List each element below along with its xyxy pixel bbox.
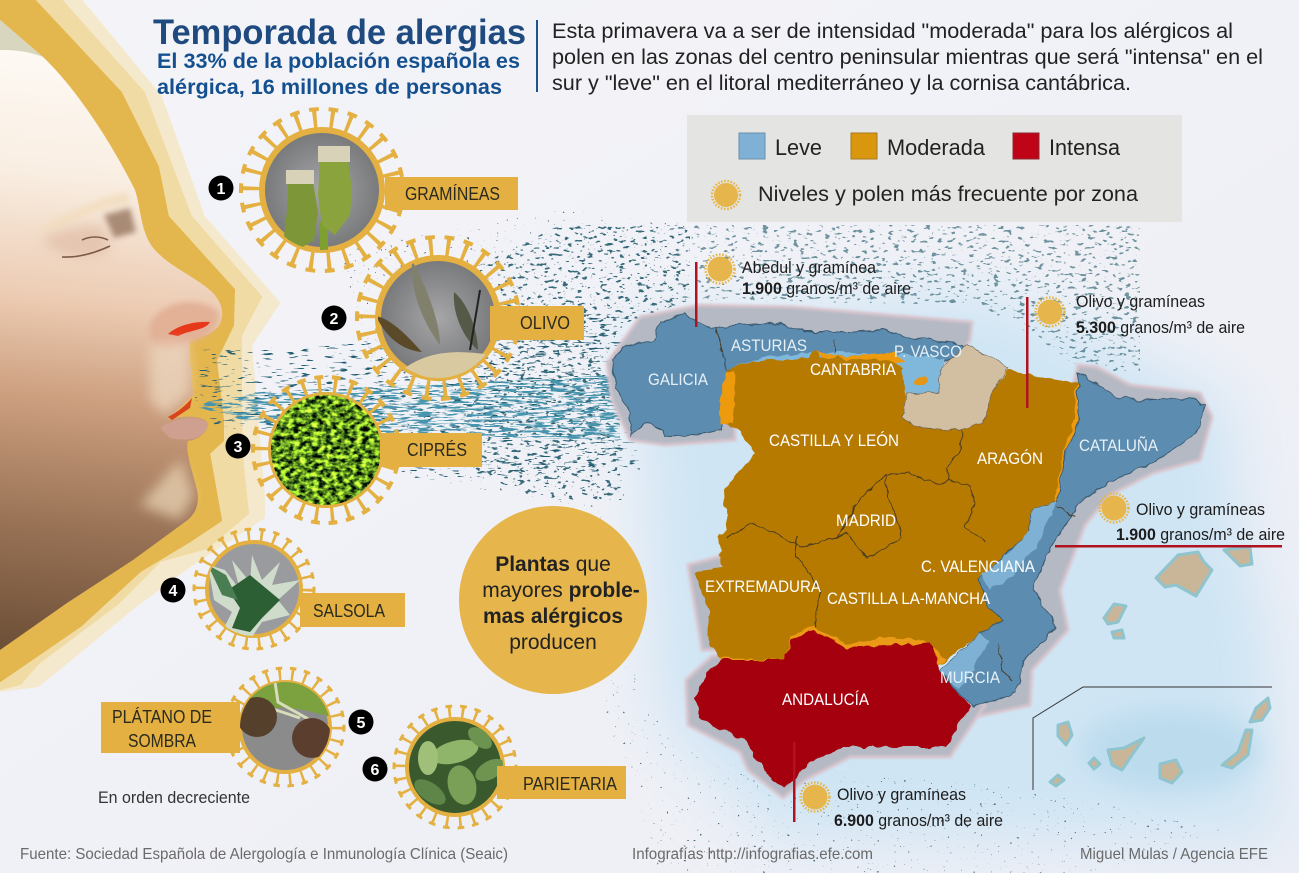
region labels: MURCIA <box>940 668 1001 687</box>
callout: Mediterranean pollen level: 1.900 granos/m³ de aire <box>1116 525 1285 544</box>
callout circle: plants causing the most problems <box>459 506 647 694</box>
intro paragraph: Esta primavera va a ser de intensidad "moderada" para los alérgicos al <box>552 20 1233 43</box>
bright orange band north of Andalucía <box>720 626 945 668</box>
plant 2: olivo <box>322 237 584 399</box>
callout circle: plants causing the most problems: mas alérgicos <box>483 605 623 628</box>
land regions with rough coastline <box>612 313 1205 788</box>
subtitle: El 33% de la población española es <box>157 50 520 73</box>
callout: north-east pollen level: 5.300 granos/m³ de aire <box>1076 318 1245 337</box>
coastal halo <box>607 305 1212 798</box>
gold halo around the profile <box>0 0 278 690</box>
plant 3: ciprés <box>226 377 482 523</box>
title block <box>153 13 526 99</box>
legend: Intensa <box>1049 135 1121 160</box>
region: Galicia <box>612 313 729 437</box>
region labels: GALICIA <box>648 370 709 389</box>
region labels: ARAGÓN <box>977 449 1043 468</box>
legend <box>687 115 1182 222</box>
plant 1: gramíneas: GRAMÍNEAS <box>405 184 500 204</box>
region labels: C. VALENCIANA <box>921 557 1036 576</box>
Balearic islands <box>1104 547 1252 638</box>
plant 5: plátano de sombra: PLÁTANO DE <box>112 707 212 727</box>
region labels: MADRID <box>836 511 896 530</box>
region: moderate central block <box>694 350 1080 667</box>
region labels: CANTABRIA <box>810 360 897 379</box>
callout: north-west pollen level: 1.900 granos/m³ de aire <box>742 279 911 298</box>
plant 6: parietaria: PARIETARIA <box>523 774 617 794</box>
region labels <box>648 336 1159 709</box>
callout: south pollen level <box>793 742 1003 830</box>
callout: south pollen level: 6.900 granos/m³ de aire <box>834 811 1003 830</box>
callout: Mediterranean pollen level <box>1055 494 1285 548</box>
plant 5: plátano de sombra: SOMBRA <box>128 731 196 751</box>
plant 1: gramíneas <box>208 109 518 271</box>
plant 6: parietaria <box>362 706 626 828</box>
legend: Leve <box>775 135 822 160</box>
region labels: CASTILLA LA-MANCHA <box>827 589 991 608</box>
intro paragraph: polen en las zonas del centro peninsular mientras que será "intensa" en el <box>552 46 1263 69</box>
plant 5: plátano de sombra: 5 <box>357 715 366 732</box>
light blue coastal gap <box>727 352 945 393</box>
sea glow around the peninsula <box>620 290 1280 840</box>
callout: north-east pollen level <box>1026 292 1245 408</box>
intro paragraph <box>552 20 1263 95</box>
callout: Mediterranean pollen level: Olivo y gramíneas <box>1136 500 1265 519</box>
region labels: EXTREMADURA <box>705 577 822 596</box>
callout: north-west pollen level <box>695 254 911 327</box>
plant 5: plátano de sombra <box>101 668 374 786</box>
subtitle <box>157 50 520 99</box>
region labels: ANDALUCÍA <box>782 690 870 709</box>
region: Navarra, La Rioja and Euskadi <box>902 345 1008 430</box>
callout: north-east pollen level: Olivo y gramíneas <box>1076 292 1205 311</box>
plant 6: parietaria: 6 <box>371 762 380 779</box>
callout circle: plants causing the most problems: producen <box>509 631 597 654</box>
callout: south pollen level: Olivo y gramíneas <box>837 785 966 804</box>
plant 4: salsola <box>160 529 405 649</box>
callout circle: plants causing the most problems: Plantas que <box>495 553 611 576</box>
footer: source: Fuente: Sociedad Española de Alergología e Inmunología Clínica (Seaic) <box>20 846 508 863</box>
plant 3: ciprés: CIPRÉS <box>407 440 467 460</box>
intro paragraph: sur y "leve" en el litoral mediterráneo y la cornisa cantábrica. <box>552 72 1131 95</box>
region labels: CATALUÑA <box>1079 436 1159 455</box>
callout: north-west pollen level: Abedul y gramínea <box>742 258 877 277</box>
pollen spray from nose and mouth <box>190 210 1240 873</box>
plant 4: salsola: SALSOLA <box>313 601 385 621</box>
title: Temporada de alergias <box>153 13 526 52</box>
plant 3: ciprés: 3 <box>234 439 243 456</box>
plant 1: gramíneas: 1 <box>217 181 226 198</box>
region borders <box>716 328 1075 680</box>
legend: Niveles y polen más frecuente por zona <box>758 183 1138 206</box>
region: Asturias, Cantabria and País Vasco <box>716 322 966 370</box>
legend: Moderada <box>887 135 986 160</box>
region: Cataluña, Valencia and Murcia <box>941 373 1205 707</box>
plant 2: olivo: 2 <box>330 311 339 328</box>
plant 2: olivo: OLIVO <box>520 313 570 333</box>
region labels: CASTILLA Y LEÓN <box>769 431 899 450</box>
footer: website: Infografías http://infografias.efe.com <box>632 846 873 863</box>
plant 4: salsola: 4 <box>169 583 178 600</box>
note: ordering: En orden decreciente <box>98 788 250 807</box>
region: Andalucía <box>695 630 972 788</box>
footer: credit: Miguel Mulas / Agencia EFE <box>1080 846 1268 863</box>
callout circle: plants causing the most problems: mayores proble- <box>482 579 640 602</box>
subtitle: alérgica, 16 millones de personas <box>157 76 502 99</box>
region labels: P. VASCO <box>894 342 962 361</box>
Canary islands inset <box>1033 687 1272 792</box>
region labels: ASTURIAS <box>731 336 807 355</box>
face in profile <box>0 20 222 650</box>
map of Spain <box>607 305 1212 798</box>
